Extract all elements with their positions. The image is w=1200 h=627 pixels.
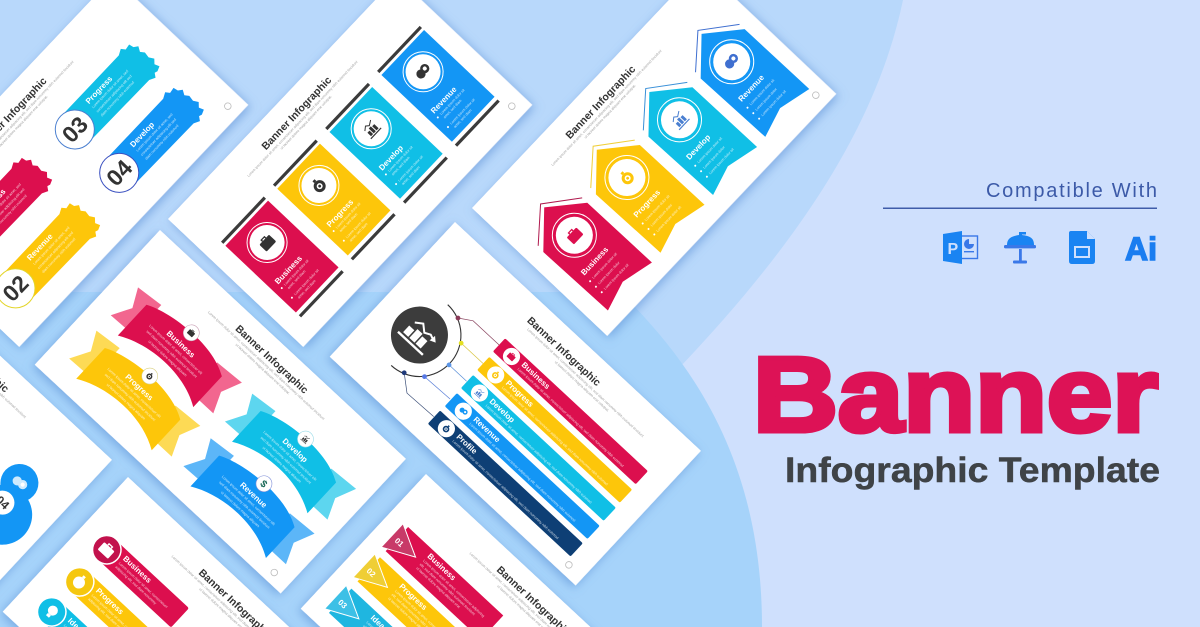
ribbon: revenue: $	[257, 479, 269, 491]
banner: develop with number 04: diam nonummy nibh euismod	[144, 124, 179, 161]
icon: keynote	[1004, 232, 1036, 264]
house banner: progress: Lorem ipsum dolor sit	[656, 205, 682, 233]
background: light blue curved area	[0, 0, 903, 627]
house banner: develop: Lorem ipsum dolor sit	[708, 148, 735, 175]
ribbon: business: ut laoreet dolore magna aliquam	[147, 340, 188, 377]
ribbon: revenue	[176, 430, 321, 571]
blue shape with icon and number 04	[0, 455, 61, 557]
pill: business: Lorem ipsum dolor sit amet, consectetuer	[118, 561, 169, 610]
ribbon: progress	[62, 322, 207, 463]
slide 6: pill bars	[3, 477, 374, 627]
banner: progress with number 03: Progress	[84, 74, 115, 106]
house banner: revenue: Lorem ipsum dolor sit	[749, 78, 775, 106]
ribbon: develop	[217, 385, 363, 526]
bar: revenue: Lorem ipsum dolor sit amet, consectetuer adipiscing elit, sed diam nonummy nibh euismod	[468, 422, 576, 523]
house banner: revenue	[675, 6, 810, 138]
icon: powerpoint	[943, 231, 978, 264]
banner: revenue with number 02: Revenue	[25, 232, 55, 262]
slide 2 subtitle: Lorem ipsum dolor sit amet, consectetuer adipiscing elit, sed diam nonummy nibh euismod tincidunt	[247, 60, 359, 178]
card: develop: amet, sed diam	[391, 156, 411, 176]
card: develop: Lorem ipsum dolor sit	[387, 145, 414, 173]
house banner: revenue: Lorem ipsum dolor sit	[760, 89, 787, 117]
house banner: progress: Progress	[632, 188, 663, 219]
slide 3 page number	[811, 90, 820, 100]
house banner: progress: Lorem ipsum dolor sit	[644, 194, 671, 222]
card: business: amet, sed diam	[297, 279, 317, 300]
card: develop: Develop	[377, 143, 405, 172]
house banner: revenue: Lorem ipsum dolor	[755, 87, 779, 112]
pill: business: Business	[121, 554, 154, 585]
slide 8: partial left slide	[0, 231, 112, 595]
slide 5: long bars with hub	[330, 222, 701, 586]
card: develop: Lorem ipsum dolor sit	[397, 155, 424, 183]
slide 5 title: Banner Infographic	[524, 315, 602, 389]
slide 7: triangle tab bars	[301, 474, 672, 627]
bar: profile: Profile	[455, 432, 479, 456]
banner: develop with number 04: Lorem ipsum dolor sit amet, sed	[136, 113, 174, 153]
bar: progress: Lorem ipsum dolor sit amet, consectetuer adipiscing elit, sed diam nonummy nibh euismod	[501, 386, 609, 486]
slide 2 page number	[507, 101, 516, 111]
tab: progress 02: Progress	[397, 582, 429, 612]
card: business: Lorem ipsum dolor sit	[293, 268, 320, 296]
ribbon: develop: sed diam nonummy nibh euismod tincidunt	[260, 436, 312, 485]
banner: develop with number 04: consectetuer adipiscing elit sed	[140, 118, 177, 157]
banner: progress with number 03: diam nonummy nibh euismod	[100, 81, 135, 117]
banner: revenue with number 02	[0, 196, 105, 318]
pill: business	[86, 529, 190, 627]
tab: business 01: Business	[426, 552, 458, 583]
card: revenue	[377, 26, 500, 147]
tab: business 01: 01	[393, 536, 406, 549]
house banner: progress	[570, 122, 705, 254]
banner: business	[0, 151, 57, 259]
pill: business: adipiscing elit, sed diam nonummy	[114, 565, 157, 605]
icon: google slides	[1069, 231, 1095, 264]
ribbon: progress: Progress	[123, 372, 155, 403]
bar: business: Business	[520, 360, 552, 391]
slide 2: rectangle cards	[168, 0, 532, 347]
subtitle: Infographic Template: Infographic Template	[785, 451, 1160, 490]
banner: develop with number 04	[90, 81, 209, 203]
house banner: business: Lorem ipsum dolor	[597, 260, 621, 285]
card: revenue: amet, sed diam	[443, 99, 463, 119]
banner: develop with number 04: Develop	[128, 120, 156, 149]
tab: business 01: ut laoreet dolore magna aliquam erat	[415, 566, 461, 609]
card: business	[221, 197, 344, 317]
bar: develop	[461, 375, 616, 521]
divider under heading	[883, 208, 1157, 209]
house banner: develop: Lorem ipsum dolor	[702, 145, 726, 170]
pill: progress	[58, 561, 163, 627]
house banner: business: Lorem ipsum dolor sit	[591, 252, 618, 280]
slide 4 subtitle: Lorem ipsum dolor sit amet, consectetuer adipiscing elit, sed diam nonummy nibh euismod tincidunt	[207, 310, 325, 421]
card: business: Lorem ipsum dolor sit	[283, 259, 310, 287]
slide 1: brush banners	[0, 0, 248, 347]
tab: idea 03	[325, 585, 447, 627]
slide 3 subtitle: ut laoreet dolore magna aliquam erat volutpat.	[584, 83, 637, 139]
pill: progress: Progress	[94, 586, 126, 617]
slide 3: arrow house banners	[472, 0, 836, 336]
icon: powerpoint: P	[948, 241, 958, 258]
card: revenue: Lorem ipsum dolor sit	[449, 98, 476, 125]
heading: compatible with: Compatible With	[986, 180, 1157, 202]
connectors and nodes	[394, 309, 500, 417]
bar: develop: Develop	[488, 397, 517, 425]
slide 4 title: Banner Infographic	[233, 324, 310, 397]
ribbon: progress: Lorem ipsum dolor sit amet, consectetuer elit	[107, 367, 161, 419]
main title: Banner: Banner	[753, 336, 1158, 454]
card: progress: amet, sed diam	[339, 212, 358, 233]
slide 1 page number	[223, 101, 232, 111]
tab: progress 02	[353, 553, 475, 627]
card: progress: amet, sed diam	[349, 222, 369, 243]
card: progress: Lorem ipsum dolor sit	[345, 211, 372, 239]
bar: profile	[428, 410, 583, 556]
house banner: business: Business	[579, 245, 611, 277]
ribbon: develop: Lorem ipsum dolor sit amet, consectetuer elit	[262, 430, 317, 482]
tab: business 01: Lorem ipsum dolor sit amet, consectetuer adipiscing	[422, 559, 485, 618]
bar: revenue	[445, 393, 600, 539]
ribbon: business: Business	[165, 329, 197, 360]
banner: revenue with number 02: Lorem ipsum dolor sit amet, sed	[32, 226, 71, 266]
house banner: business	[518, 179, 653, 312]
banner: progress with number 03	[45, 37, 164, 159]
ribbon: revenue: Lorem ipsum dolor sit amet, consectetuer elit	[221, 475, 276, 526]
bar: progress	[477, 357, 632, 503]
slide 5 subtitle: ut laoreet dolore magna aliquam erat volutpat.	[554, 360, 610, 413]
tab: progress 02: 02	[365, 566, 378, 579]
banner: progress with number 03: 03	[57, 111, 93, 148]
pill: idea	[31, 591, 135, 627]
card: develop: amet, sed diam	[401, 165, 421, 186]
ribbon: develop: Develop	[281, 437, 309, 464]
slide 2 subtitle: ut laoreet dolore magna aliquam erat volutpat.	[280, 94, 333, 150]
ribbon: business: sed diam nonummy nibh euismod tincidunt	[145, 330, 198, 379]
icon: illustrator Ai: Ai	[1125, 231, 1157, 267]
house banner: develop: Develop	[684, 133, 712, 162]
card: revenue: Lorem ipsum dolor sit	[439, 88, 466, 116]
tab: business 01: elit, sed diam nonummy nibh euismod tincidunt	[419, 563, 476, 616]
slide 4: ribbon banners	[35, 230, 406, 594]
bar: business	[493, 338, 648, 484]
banner: develop with number 04: 04	[101, 154, 138, 191]
banner: progress with number 03: consectetuer adipiscing elit sed	[96, 74, 133, 113]
ribbon: progress: sed diam nonummy nibh euismod tincidunt	[104, 373, 156, 422]
banner: progress with number 03: Lorem ipsum dolor sit amet, sed	[91, 69, 129, 109]
banner: revenue with number 02: diam nonummy nibh euismod	[41, 237, 76, 274]
ribbon: revenue: sed diam nonummy nibh euismod tincidunt	[218, 480, 270, 530]
slide 5 page number	[564, 560, 574, 570]
bar: profile: Lorem ipsum dolor sit amet, consectetuer adipiscing elit, sed diam nonummy nibh euismod	[451, 439, 559, 540]
bar: progress: Progress	[504, 379, 536, 409]
card: revenue: Revenue	[429, 85, 459, 115]
card: business: Business	[273, 254, 304, 286]
ribbon: revenue: Revenue	[238, 480, 269, 510]
slide 3 subtitle: Lorem ipsum dolor sit amet, consectetuer adipiscing elit, sed diam nonummy nibh euismod tincidunt	[551, 49, 663, 167]
card: business: amet, sed diam	[287, 269, 307, 290]
ribbon: progress: ut laoreet dolore magna aliquam	[106, 383, 146, 421]
bar: revenue: Revenue	[471, 415, 502, 445]
slide 2 title: Banner Infographic	[259, 74, 334, 153]
house banner: develop: Lorem ipsum dolor sit	[697, 136, 723, 164]
slide 3 title: Banner Infographic	[563, 63, 638, 142]
house banner: business: Lorem ipsum dolor sit	[603, 263, 630, 291]
card: progress: Progress	[325, 197, 356, 229]
banner: revenue with number 02: consectetuer adipiscing elit sed	[37, 231, 74, 270]
house banner: revenue: Revenue	[737, 73, 766, 104]
bar: develop: Lorem ipsum dolor sit amet, consectetuer adipiscing elit, sed diam nonummy nibh euismod	[485, 404, 592, 505]
ribbon: business: Lorem ipsum dolor sit amet, consectetuer elit	[148, 324, 203, 375]
slide 4 page number	[270, 568, 279, 577]
background: darker blue curved area	[0, 292, 762, 627]
ribbon: revenue: ut laoreet dolore magna aliquam	[220, 490, 260, 528]
ribbon: develop: ut laoreet dolore magna aliquam	[262, 446, 302, 484]
house banner: progress: Lorem ipsum dolor	[650, 202, 674, 227]
tab: idea 03: 03	[336, 598, 349, 611]
house banner: develop	[623, 64, 758, 196]
hub arc	[391, 305, 478, 394]
tab: business 01	[381, 523, 503, 627]
card: progress	[273, 140, 396, 260]
hub circle with chart icon	[379, 295, 460, 375]
ribbon: business	[103, 279, 249, 420]
card: revenue: amet, sed diam	[453, 108, 473, 129]
slide 5 subtitle: Lorem ipsum dolor sit amet, consectetuer adipiscing elit, sed diam nonummy nibh euismod tincidunt	[526, 328, 644, 438]
bar: business: Lorem ipsum dolor sit amet, consectetuer adipiscing elit, sed diam nonummy nibh euismod	[517, 367, 624, 468]
card: develop	[325, 83, 448, 204]
slide 4 subtitle: ut laoreet dolore magna aliquam erat volutpat.	[235, 343, 291, 396]
card: progress: Lorem ipsum dolor sit	[335, 202, 361, 230]
